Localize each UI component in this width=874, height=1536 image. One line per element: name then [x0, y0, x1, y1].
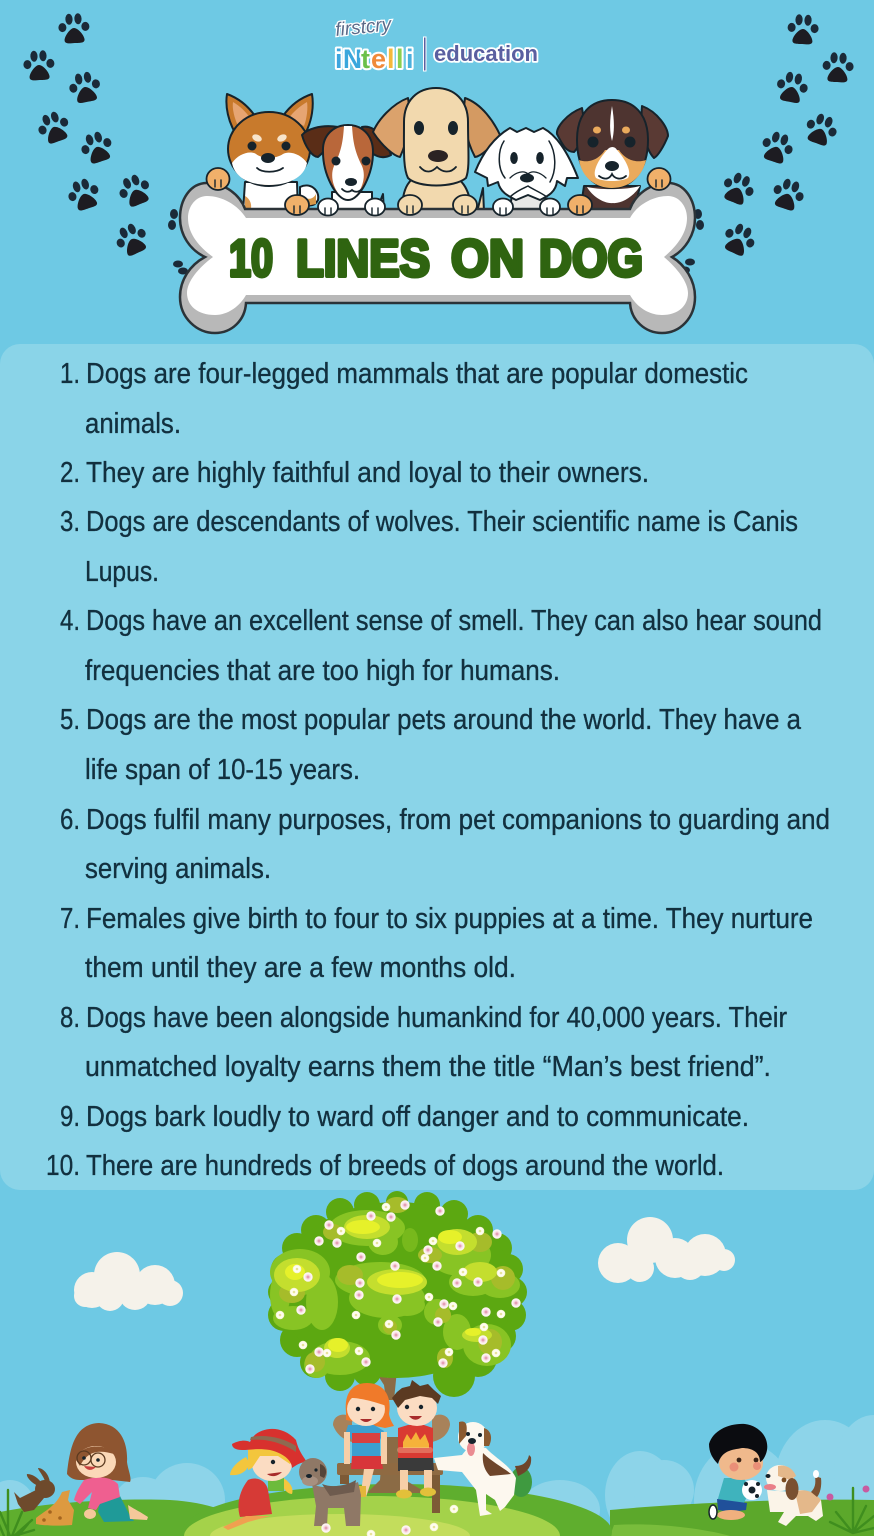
- title: 10: [229, 230, 273, 288]
- dog 3: yellow labrador: [373, 88, 500, 212]
- foliage mid green: [270, 1210, 520, 1378]
- dog 2: jack russell: [302, 125, 391, 212]
- dog 4: white maltese: [475, 128, 578, 212]
- cloud: right: [598, 1217, 735, 1283]
- numbered list: serving animals.: [85, 853, 271, 885]
- numbered list: 9.: [60, 1101, 80, 1133]
- numbered list: [46, 358, 830, 1182]
- girl with orange hair: [344, 1383, 394, 1497]
- white spotted dog standing: [434, 1422, 532, 1516]
- right hill: [610, 1500, 874, 1536]
- logo: intelli wordmark: t: [361, 44, 370, 74]
- panel: ten lines list: [0, 344, 874, 1190]
- boy with soccer ball: [709, 1424, 767, 1520]
- numbered list: them until they are a few months old.: [85, 952, 516, 984]
- children on bench: [344, 1380, 441, 1498]
- logo: intelli wordmark: l: [387, 44, 395, 74]
- left hill: [0, 1500, 260, 1536]
- panel background: [0, 344, 874, 1190]
- numbered list: 6.: [60, 804, 80, 836]
- logo: intelli wordmark: i: [406, 44, 414, 74]
- beagle: [764, 1465, 823, 1526]
- ground hills: [0, 1484, 874, 1536]
- tree: [268, 1191, 527, 1400]
- logo: education wordmark: education: [434, 41, 538, 66]
- logo: intelli wordmark: e: [371, 44, 386, 74]
- girl in red hat: [223, 1429, 307, 1530]
- grass tufts: [0, 1488, 874, 1536]
- numbered list: 5.: [60, 704, 80, 736]
- numbered list: animals.: [85, 408, 181, 440]
- numbered list: 10.: [46, 1150, 80, 1182]
- title: [229, 230, 643, 288]
- numbered list: 2.: [60, 457, 80, 489]
- logo: intelli wordmark: i: [335, 44, 343, 74]
- numbered list: Dogs bark loudly to ward off danger and to communicate.: [86, 1101, 749, 1133]
- numbered list: frequencies that are too high for humans.: [85, 655, 560, 687]
- dog 5: bernese: [557, 100, 668, 212]
- distant pale hills: [0, 1415, 874, 1536]
- bone sign: [180, 183, 695, 333]
- title: LINES: [296, 230, 430, 288]
- dog 1: shiba: [226, 94, 318, 212]
- green bush behind dog: [510, 1467, 532, 1497]
- foliage light patches: [274, 1215, 497, 1358]
- numbered list: Lupus.: [85, 556, 159, 588]
- cloud: left: [74, 1252, 183, 1311]
- numbered list: Dogs have been alongside humankind for 40,000 years. Their: [86, 1002, 787, 1034]
- numbered list: Females give birth to four to six puppies at a time. They nurture: [86, 903, 813, 935]
- paw prints: right trail: [718, 14, 854, 259]
- numbered list: unmatched loyalty earns them the title “Man’s best friend”.: [85, 1051, 771, 1083]
- logo: intelli wordmark: l: [396, 44, 404, 74]
- logo: intelli wordmark: [335, 44, 414, 74]
- title: ON: [451, 230, 524, 288]
- tree flowers: [276, 1201, 520, 1373]
- bone white face: [187, 196, 688, 315]
- logo: firstcry wordmark: firstcry: [334, 14, 394, 41]
- right boy with beagle: [709, 1424, 823, 1526]
- numbered list: Dogs are four-legged mammals that are popular domestic: [86, 358, 748, 390]
- numbered list: 3.: [60, 506, 80, 538]
- numbered list: life span of 10-15 years.: [85, 754, 360, 786]
- foliage olive clumps: [279, 1197, 515, 1372]
- girl with glasses: [67, 1423, 148, 1522]
- five dogs above the bone: [226, 88, 668, 212]
- girl in red hat with grey dog: [223, 1429, 361, 1530]
- trunk branches: [373, 1366, 397, 1400]
- paw toes peeking behind bone: [168, 209, 704, 274]
- paw prints: left trail: [23, 13, 155, 259]
- foliage yellow highlights: [285, 1220, 481, 1352]
- logo: intelli wordmark: N: [343, 44, 362, 74]
- logo: divider: [424, 37, 426, 71]
- numbered list: Dogs are the most popular pets around the world. They have a: [86, 704, 802, 736]
- foliage: [268, 1191, 527, 1397]
- central hill: [182, 1484, 612, 1536]
- numbered list: Dogs are descendants of wolves. Their scientific name is Canis: [86, 506, 798, 538]
- numbered list: They are highly faithful and loyal to their owners.: [86, 457, 649, 489]
- logo: FirstCry Intelli education: [334, 14, 538, 74]
- small flowers on hill: [322, 1486, 870, 1536]
- numbered list: 1.: [60, 358, 80, 390]
- brown puppy: [14, 1468, 55, 1512]
- numbered list: 8.: [60, 1002, 80, 1034]
- boy with brown hair: [392, 1380, 441, 1498]
- grey dog: [299, 1458, 361, 1526]
- numbered list: 7.: [60, 903, 80, 935]
- bone outline and shading: [180, 183, 695, 333]
- numbered list: There are hundreds of breeds of dogs around the world.: [86, 1150, 724, 1182]
- orange puppy: [36, 1490, 74, 1526]
- foliage outline lobes: [268, 1191, 527, 1397]
- bench and lower trunk: [333, 1415, 450, 1513]
- title: DOG: [539, 230, 643, 288]
- left girl with two puppies: [14, 1423, 148, 1526]
- dog paws resting on bone: [206, 168, 670, 216]
- numbered list: 4.: [60, 605, 80, 637]
